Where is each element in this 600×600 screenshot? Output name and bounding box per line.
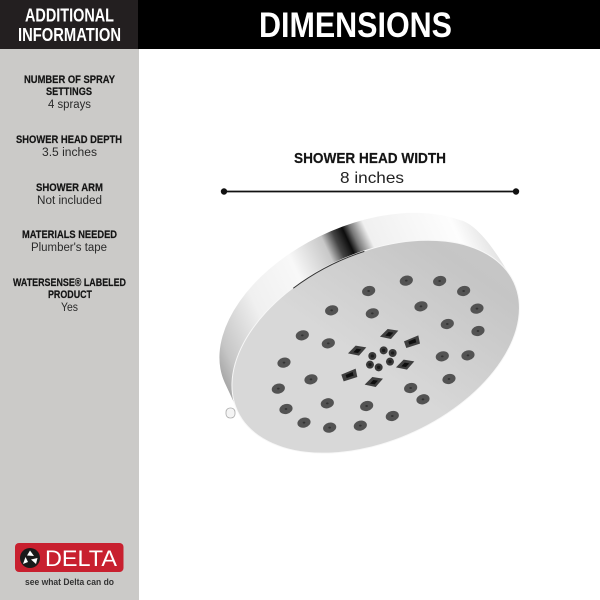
dimension label: shower head width — [294, 150, 446, 187]
dimension label: shower head width: SHOWER HEAD WIDTH — [294, 150, 446, 167]
heading: additional information — [0, 0, 138, 49]
info: number of spray settings: NUMBER OF SPRAY — [24, 74, 116, 86]
connector peg — [226, 408, 235, 418]
shower head face — [199, 198, 553, 495]
info: shower arm: SHOWER ARM — [36, 182, 103, 194]
rim shadow line — [291, 250, 366, 288]
heading: additional information: ADDITIONAL — [25, 6, 114, 26]
spray nozzles — [271, 274, 486, 434]
info: shower head depth — [16, 134, 122, 159]
info: number of spray settings: 4 sprays — [48, 99, 91, 111]
logo: delta: see what Delta can do — [25, 577, 114, 587]
logo: delta: DELTA — [45, 546, 117, 571]
info: shower head depth: SHOWER HEAD DEPTH — [16, 134, 122, 146]
info: number of spray settings: SETTINGS — [46, 86, 92, 98]
info: watersense labeled product — [13, 277, 126, 314]
info: materials needed — [22, 229, 117, 254]
icon: delta symbol — [20, 548, 40, 568]
shower head illustration — [185, 170, 554, 497]
logo: delta — [15, 543, 124, 587]
info: watersense labeled product: PRODUCT — [48, 289, 92, 301]
info: number of spray settings — [24, 74, 116, 111]
top black header bar — [0, 0, 600, 49]
title: dimensions: DIMENSIONS — [259, 6, 452, 45]
info: shower head depth: 3.5 inches — [42, 147, 97, 159]
info: shower arm — [36, 182, 103, 207]
dimension label: shower head width: 8 inches — [340, 170, 404, 187]
info: shower arm: Not included — [37, 195, 102, 207]
info: watersense labeled product: Yes — [61, 302, 78, 314]
dimension arrow line — [221, 188, 519, 195]
heading: additional information: INFORMATION — [18, 25, 121, 45]
shower head rim — [185, 170, 554, 497]
info: watersense labeled product: WATERSENSE® LABELED — [13, 277, 126, 289]
info: materials needed: MATERIALS NEEDED — [22, 229, 117, 241]
sidebar panel — [0, 48, 139, 600]
info: materials needed: Plumber's tape — [31, 242, 107, 254]
